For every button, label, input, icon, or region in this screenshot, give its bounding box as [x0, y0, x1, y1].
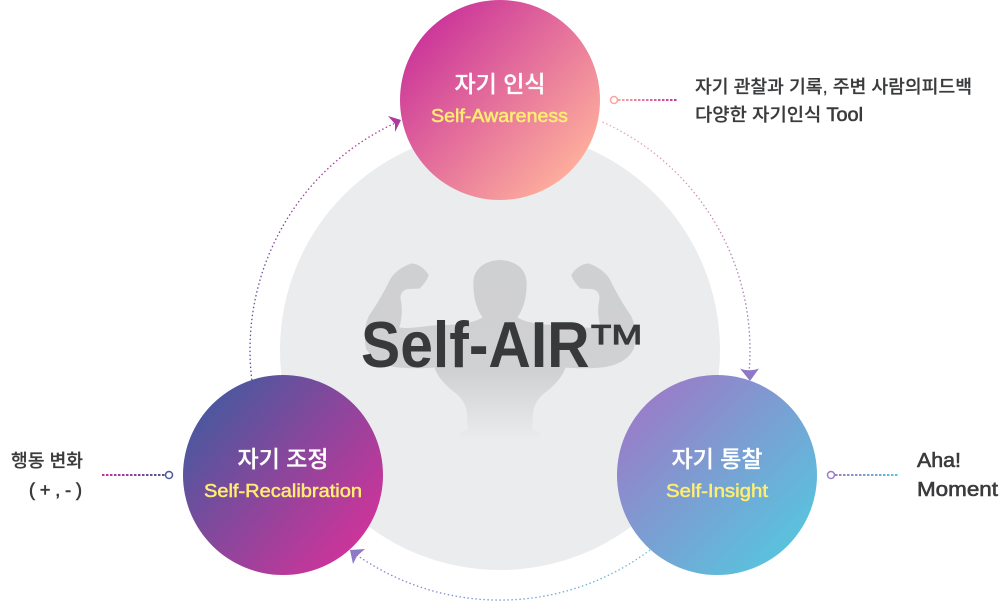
- title: Self-AIR: Self-AIR: [361, 309, 590, 382]
- text block: insight note: [917, 450, 998, 501]
- arrow: recalibration to awareness: [250, 116, 401, 380]
- text block: awareness note: 자기 관찰과 기록, 주변 사람의피드백: [695, 77, 972, 97]
- heading: self-recalibration Korean: 자기 조정: [237, 446, 329, 472]
- icon: flexing body silhouette: [365, 260, 635, 441]
- heading: self-insight Korean: 자기 통찰: [671, 446, 763, 472]
- label: self-awareness English: Self-Awareness: [431, 106, 568, 126]
- text block: recalibration note: ( + , - ): [29, 480, 82, 500]
- connector: recalibration note: [102, 472, 172, 478]
- connector: awareness note: [610, 96, 678, 104]
- connector: insight note: [828, 472, 898, 478]
- heading: self-awareness Korean: 자기 인식: [454, 71, 546, 97]
- text block: awareness note: 다양한 자기인식 Tool: [695, 105, 863, 126]
- label: self-insight English: Self-Insight: [666, 481, 768, 501]
- panel: self-insight circle: [617, 375, 817, 575]
- title: Self-AIR: ™: [586, 314, 646, 371]
- background circle: [280, 130, 720, 570]
- label: self-recalibration English: Self-Recalibration: [204, 481, 362, 501]
- text block: insight note: Moment: [917, 479, 998, 501]
- text block: insight note: Aha!: [917, 450, 961, 472]
- panel: self-awareness circle: [400, 0, 600, 200]
- text block: awareness note: [695, 77, 972, 126]
- arrow: awareness to insight: [602, 122, 759, 381]
- arrow: insight to recalibration: [350, 549, 650, 600]
- panel: self-recalibration circle: [183, 375, 383, 575]
- text block: recalibration note: 행동 변화: [11, 451, 83, 471]
- text block: recalibration note: [11, 451, 83, 500]
